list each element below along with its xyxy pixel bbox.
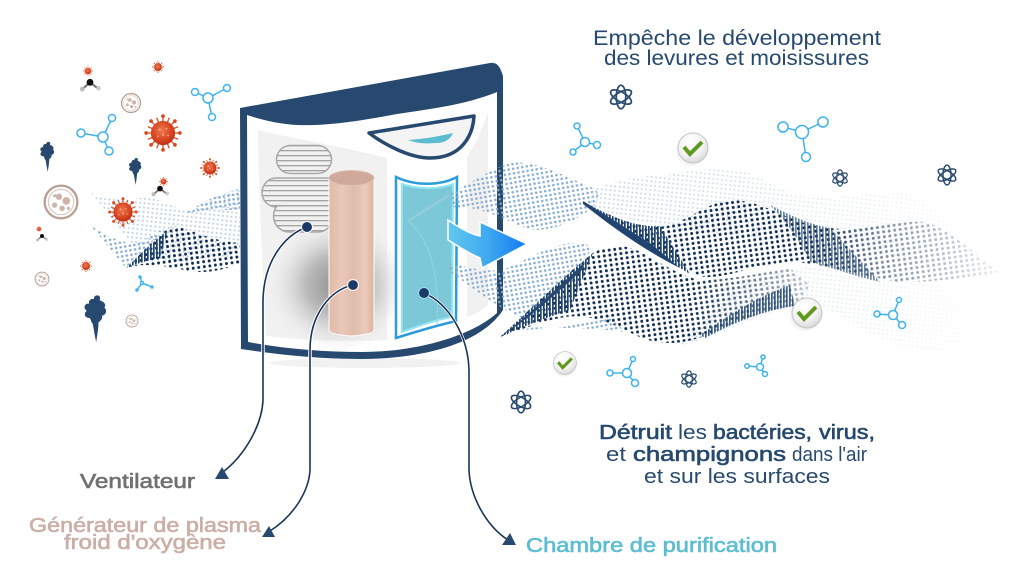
purification chamber	[396, 177, 457, 338]
label: generateur de plasma: froid d'oxygène	[64, 532, 226, 554]
pollutants: viruses	[36, 61, 220, 272]
text: bottom benefit: champignons	[633, 443, 786, 466]
text: bottom benefit: et sur les surfaces	[644, 465, 830, 488]
pollutants: spores	[35, 94, 140, 327]
light upper wave	[450, 163, 598, 230]
dark lower wave	[500, 246, 810, 343]
text: top benefit: Empêche le développement	[593, 27, 881, 50]
connector: generateur	[262, 280, 358, 537]
text: bottom benefit: Détruit	[599, 421, 672, 444]
blue molecules	[77, 84, 906, 386]
fan fins	[262, 146, 340, 232]
dark upper wave	[584, 200, 1002, 282]
label: generateur de plasma: Générateur de plasma	[29, 515, 262, 537]
label: chambre de purification: Chambre de purification	[526, 535, 777, 557]
right air waves	[450, 163, 1002, 350]
text: bottom benefit: bactéries,	[713, 421, 812, 444]
left air waves	[90, 189, 240, 272]
connector: ventilateur	[215, 222, 312, 479]
text: top benefit	[593, 27, 881, 70]
purifier device	[240, 63, 503, 359]
label: ventilateur: Ventilateur	[80, 471, 195, 493]
text: bottom benefit: dans l'air	[792, 443, 867, 466]
check badges	[552, 133, 822, 377]
light lower wave	[450, 243, 592, 320]
text: top benefit: des levures et moisissures	[604, 47, 869, 70]
plasma cylinder	[329, 170, 374, 336]
device body	[240, 63, 503, 358]
text: bottom benefit: et	[606, 443, 626, 466]
device shadow	[270, 358, 460, 368]
text: bottom benefit	[599, 421, 875, 488]
radial shadow	[266, 217, 410, 353]
text: bottom benefit: virus,	[819, 421, 875, 444]
atom icons	[509, 85, 958, 413]
light lower continuation	[682, 266, 950, 349]
connector: chambre	[418, 288, 516, 545]
display window	[369, 116, 474, 158]
pollutants: dark molecules	[36, 79, 169, 241]
pollutants: mold smoke	[40, 142, 141, 342]
label: generateur de plasma	[29, 515, 262, 554]
device frame	[240, 63, 503, 359]
text: bottom benefit: les	[678, 421, 707, 444]
outlet arrow	[448, 220, 527, 268]
grey inner panels	[258, 112, 488, 341]
